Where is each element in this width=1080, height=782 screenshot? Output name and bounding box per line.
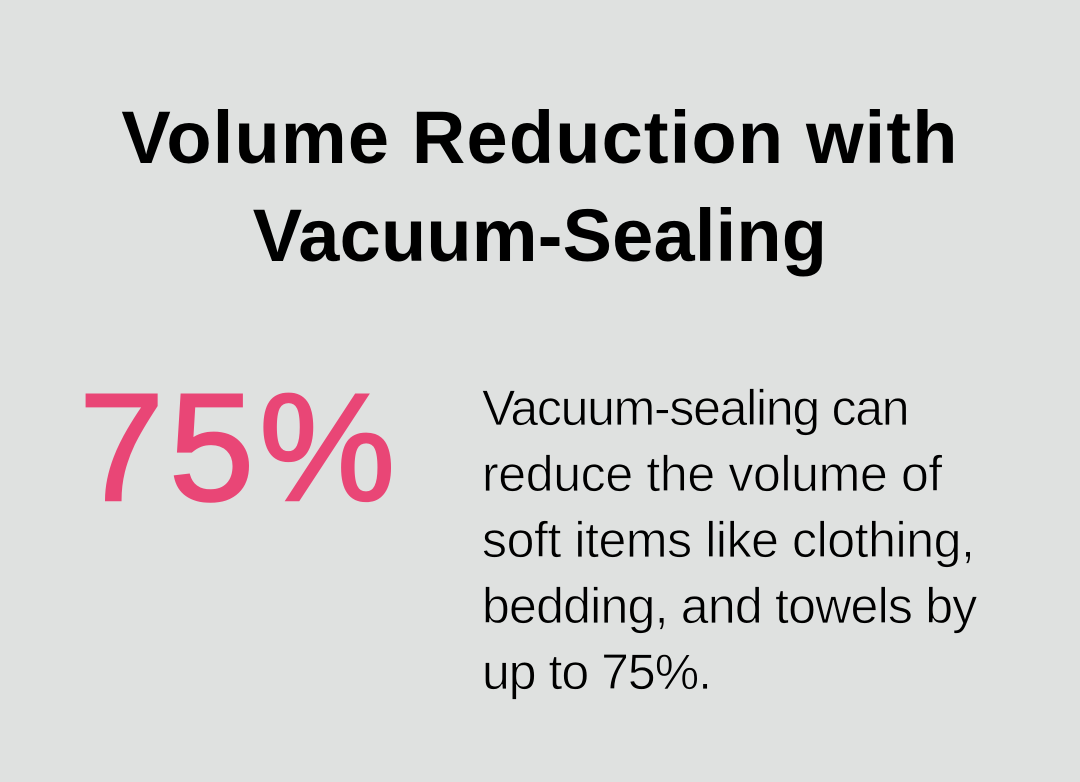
description text: bedding, and towels by (482, 578, 977, 634)
description text: soft items like clothing, (482, 512, 974, 568)
big stat: 75%: 75% (79, 362, 400, 533)
title: Vacuum-Sealing (253, 194, 827, 277)
description text: reduce the volume of (482, 446, 942, 502)
description text: Vacuum-sealing can (482, 380, 908, 436)
title: Volume Reduction with (121, 96, 959, 179)
description text: up to 75%. (482, 644, 711, 700)
description text (482, 380, 977, 700)
title (121, 96, 959, 277)
